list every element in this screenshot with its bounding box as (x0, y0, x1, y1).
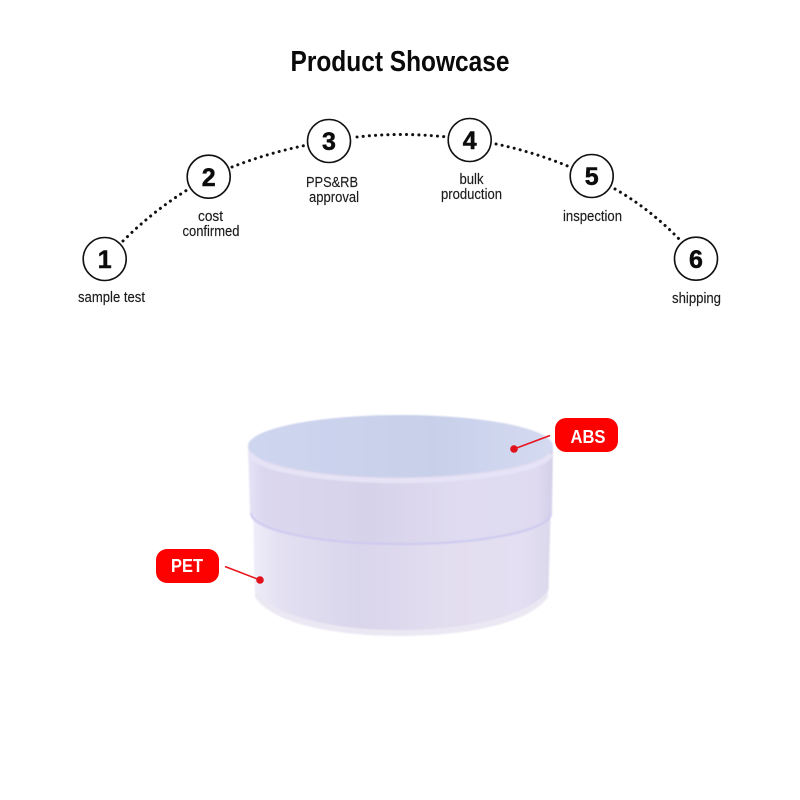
step 4: bulk production: bulk (460, 172, 484, 188)
step 1: sample test (78, 238, 145, 306)
step 3: PPS&RB approval: approval (309, 190, 359, 206)
step 2: cost confirmed (182, 155, 240, 240)
step 3: PPS&RB approval: PPS&RB (306, 175, 358, 191)
step 3: PPS&RB approval: 3 (322, 128, 336, 156)
jar base rim (255, 590, 548, 636)
callout: ABS: ABS (570, 427, 606, 447)
jar cap side (248, 446, 553, 543)
step 6: shipping: shipping (672, 291, 721, 307)
dotted arc connecting the steps (123, 134, 680, 241)
callout: PET: PET (171, 556, 203, 576)
cap rim highlight (250, 454, 551, 481)
cap top (248, 415, 553, 477)
step 2: cost confirmed: confirmed (182, 224, 240, 240)
step 4: bulk production: production (441, 187, 502, 203)
callout: PET (156, 549, 264, 584)
step 4: bulk production: 4 (463, 127, 477, 155)
callout: ABS (510, 418, 618, 453)
step 1: sample test: 1 (98, 246, 112, 274)
step 4: bulk production (441, 118, 502, 203)
seam between cap and body (251, 513, 551, 544)
step 5: inspection: inspection (563, 209, 622, 225)
step 5: inspection (563, 154, 622, 225)
step 5: inspection: 5 (585, 163, 599, 191)
step 2: cost confirmed: cost (198, 209, 223, 225)
step 2: cost confirmed: 2 (202, 164, 216, 192)
title: Product Showcase (290, 46, 510, 78)
step 6: shipping (672, 237, 721, 307)
step 6: shipping: 6 (689, 246, 703, 274)
step 3: PPS&RB approval (306, 120, 359, 206)
product: cosmetic jar (248, 415, 553, 636)
jar body (253, 500, 551, 630)
step 1: sample test: sample test (78, 290, 145, 306)
